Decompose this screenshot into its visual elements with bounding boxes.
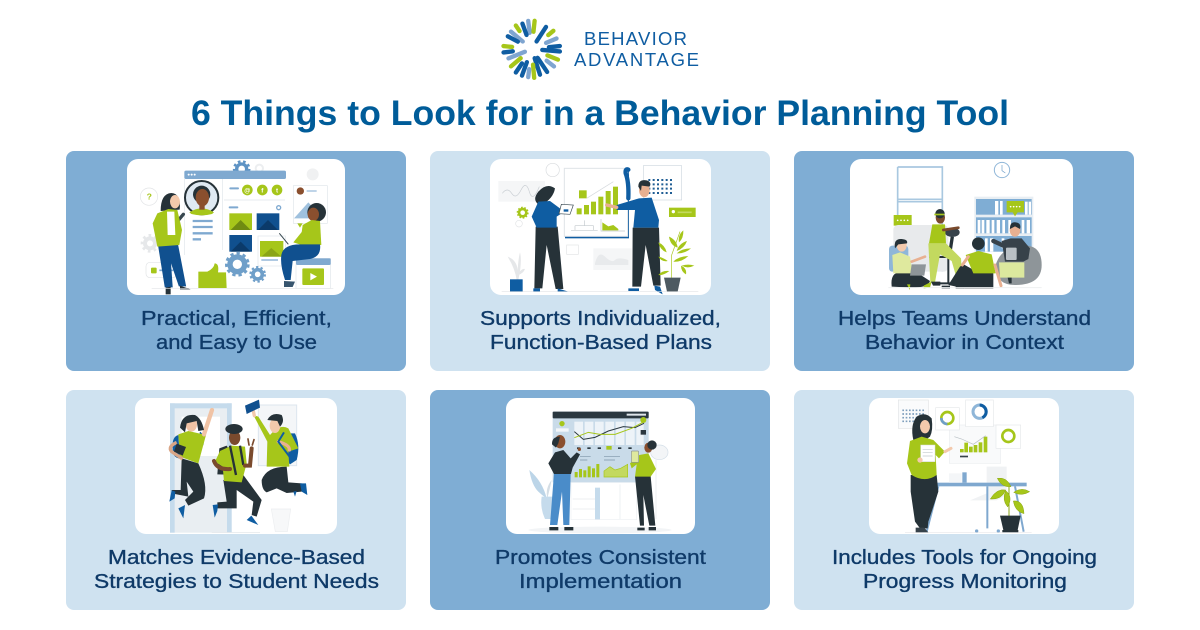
calendar xyxy=(643,166,682,200)
whiteboard xyxy=(564,168,629,238)
logo xyxy=(503,21,699,78)
woman with magnifier xyxy=(153,193,191,294)
sofa xyxy=(889,225,948,272)
card background xyxy=(66,390,406,610)
magnifier xyxy=(167,181,218,234)
lamp xyxy=(651,445,668,460)
man on floor xyxy=(942,237,1001,288)
card text: Strategies to Student Needs xyxy=(94,570,379,593)
card text: Implementation xyxy=(519,570,682,593)
thumbs up xyxy=(198,263,227,288)
check pill xyxy=(146,262,177,278)
panel: progress monitoring xyxy=(794,390,1134,610)
card background xyxy=(66,151,406,371)
cabinet xyxy=(571,482,637,520)
plant left xyxy=(508,252,525,292)
potted plant xyxy=(990,478,1030,532)
illustration: presenting chart xyxy=(498,163,698,294)
woman presenting xyxy=(907,414,951,532)
man viewing board xyxy=(548,435,581,530)
beanbag person xyxy=(993,222,1042,285)
logo wordmark xyxy=(574,28,699,70)
chair and seated woman xyxy=(928,209,962,286)
blue gears xyxy=(226,253,265,282)
speech bubbles xyxy=(894,201,1024,230)
image frame xyxy=(850,159,1073,295)
panel: practical, efficient xyxy=(66,151,406,371)
card text: Progress Monitoring xyxy=(863,570,1067,593)
bar chart card xyxy=(949,425,1001,463)
illustration: profile review xyxy=(140,161,333,294)
back window xyxy=(258,405,297,466)
calendar xyxy=(898,400,928,428)
video window xyxy=(296,258,331,288)
card text: Practical, Efficient, xyxy=(141,307,332,330)
student 1 xyxy=(169,410,212,518)
illustration: profile review: ? xyxy=(147,192,152,202)
woman with tablet xyxy=(532,186,573,292)
door xyxy=(170,403,232,533)
card text: Function-Based Plans xyxy=(490,331,712,354)
logo mark: radial burst xyxy=(503,21,560,78)
donut card 2 xyxy=(966,400,993,427)
panel: consistent implementation xyxy=(430,390,770,610)
logo wordmark: BEHAVIOR xyxy=(584,28,687,49)
illustration: profile review: t xyxy=(276,187,279,194)
image frame xyxy=(490,159,711,295)
clock xyxy=(994,162,1010,178)
illustration: profile review: @ xyxy=(244,187,250,194)
card text xyxy=(141,307,332,354)
illustration: dashboard review xyxy=(528,412,672,533)
card text: Matches Evidence-Based xyxy=(108,546,365,569)
man pointing xyxy=(607,180,663,294)
card text xyxy=(94,546,379,593)
donut card 3 xyxy=(996,425,1021,448)
photo card xyxy=(293,186,327,228)
image frame xyxy=(506,398,695,534)
panel: individualized plans xyxy=(430,151,770,371)
illustration: profile review: f xyxy=(261,187,264,194)
bookcase xyxy=(974,197,1033,252)
title: 6 Things to Look for in a Behavior Planning Tool xyxy=(191,94,1009,133)
card background xyxy=(794,390,1134,610)
card background xyxy=(794,151,1134,371)
card text: Promotes Consistent xyxy=(495,546,706,569)
id tag xyxy=(669,208,696,217)
desk xyxy=(927,467,1027,533)
card text: Helps Teams Understand xyxy=(838,307,1091,330)
card text xyxy=(838,307,1091,354)
woman with laptop xyxy=(279,203,326,287)
image frame xyxy=(869,398,1059,534)
card text xyxy=(495,546,706,593)
card text: and Easy to Use xyxy=(156,331,317,354)
illustration: jumping students xyxy=(169,400,307,533)
card text xyxy=(832,546,1097,593)
student 2 xyxy=(213,424,262,525)
wastebasket xyxy=(271,509,291,532)
illustration: monitoring charts xyxy=(898,400,1032,533)
window xyxy=(898,167,942,272)
woman viewing board xyxy=(630,440,657,530)
dashboard board xyxy=(553,412,649,482)
donut card 1 xyxy=(936,408,959,430)
image frame xyxy=(135,398,337,534)
student 3 xyxy=(245,400,307,497)
panel: evidence-based strategies xyxy=(66,390,406,610)
card text: Includes Tools for Ongoing xyxy=(832,546,1097,569)
woman left with laptop xyxy=(891,239,932,290)
card background xyxy=(430,151,770,371)
card background xyxy=(430,390,770,610)
plant and vase xyxy=(529,470,553,519)
card text: Supports Individualized, xyxy=(480,307,721,330)
image frame xyxy=(127,159,345,295)
logo wordmark: ADVANTAGE xyxy=(574,49,699,70)
card text xyxy=(480,307,721,354)
panel: teams understand behavior xyxy=(794,151,1134,371)
card text: Behavior in Context xyxy=(865,331,1064,354)
plant right xyxy=(658,230,694,292)
illustration: team discussion xyxy=(888,162,1042,290)
